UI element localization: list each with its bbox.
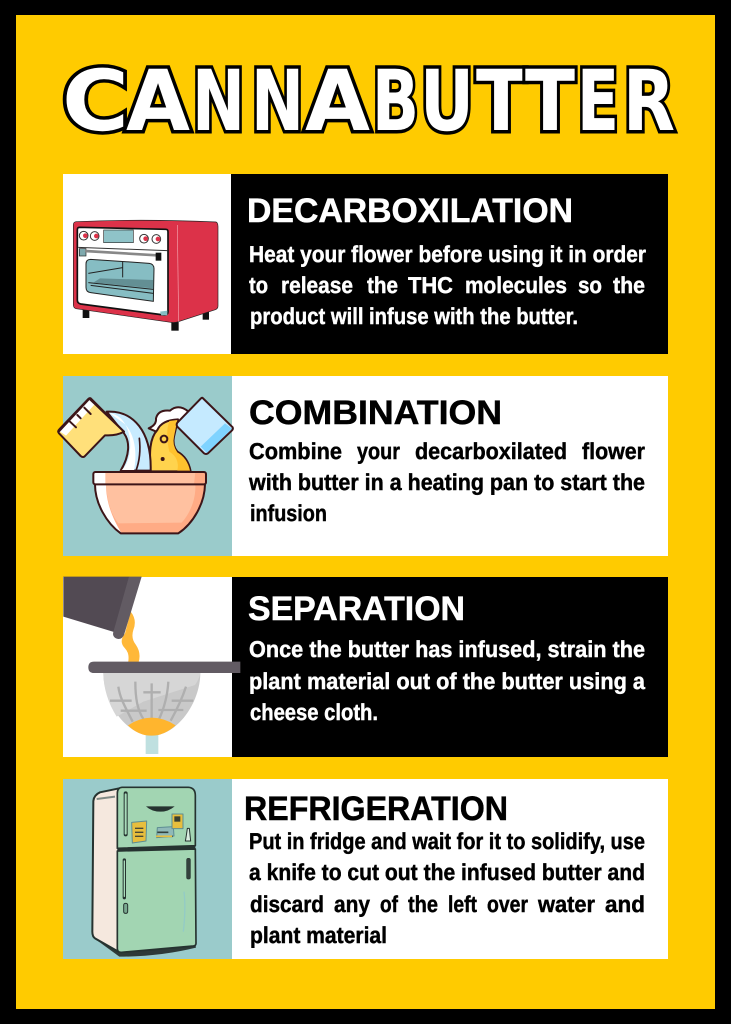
text block: so — [578, 272, 602, 298]
title: U — [420, 52, 474, 150]
text block: and — [605, 891, 645, 917]
icon: strainer and pot — [63, 577, 240, 754]
title: N — [192, 52, 245, 150]
text block: release — [281, 272, 353, 298]
title: T — [525, 52, 575, 150]
panel: refrigeration — [63, 779, 668, 959]
heading: REFRIGERATION — [244, 790, 508, 828]
text block: discard — [250, 891, 324, 917]
text block: plant material out of the butter using a — [249, 668, 645, 694]
text block: Combine — [249, 438, 342, 464]
text block: water — [537, 891, 595, 917]
text block: THC — [408, 272, 453, 298]
text block: a knife to cut out the infused butter and — [249, 859, 645, 885]
text block: over — [487, 891, 528, 917]
text block: of — [380, 891, 398, 917]
text block: Once the butter has infused, strain the — [249, 636, 645, 662]
text block: left — [448, 891, 477, 917]
title: R — [623, 52, 675, 150]
text block: your — [357, 438, 400, 464]
title: B — [372, 52, 419, 150]
text block: flower — [582, 438, 645, 464]
text block — [249, 241, 646, 329]
text block: to — [249, 272, 268, 298]
text block: decarboxilated — [415, 438, 567, 464]
panel: decarboxilation — [63, 174, 668, 354]
title: C — [62, 52, 129, 150]
icon: refrigerator — [92, 787, 196, 957]
text block: product will infuse with the butter. — [250, 303, 578, 329]
heading: SEPARATION — [248, 590, 465, 628]
title: E — [577, 52, 619, 150]
title: A — [126, 52, 190, 150]
icon: mixing bowl — [58, 398, 233, 533]
text block — [249, 636, 645, 725]
title: T — [476, 52, 526, 150]
text block: plant material — [250, 922, 387, 948]
text block: with butter in a heating pan to start the — [248, 469, 645, 495]
heading: DECARBOXILATION — [247, 192, 573, 230]
text block — [248, 438, 645, 526]
title: A — [305, 52, 370, 150]
text block: infusion — [250, 500, 327, 526]
text block: the — [408, 891, 438, 917]
text block: any — [334, 891, 370, 917]
text block: Put in fridge and wait for it to solidify, use — [249, 828, 645, 854]
panel: combination — [58, 376, 668, 556]
title: N — [251, 52, 304, 150]
panel: separation — [63, 577, 668, 757]
text block: the — [613, 272, 645, 298]
icon: toaster oven — [73, 220, 218, 331]
text block: Heat your flower before using it in order — [249, 241, 646, 267]
text block: molecules — [465, 272, 567, 298]
heading: COMBINATION — [249, 394, 502, 432]
text block: the — [367, 272, 398, 298]
text block: cheese cloth. — [250, 699, 378, 725]
text block — [249, 828, 645, 948]
